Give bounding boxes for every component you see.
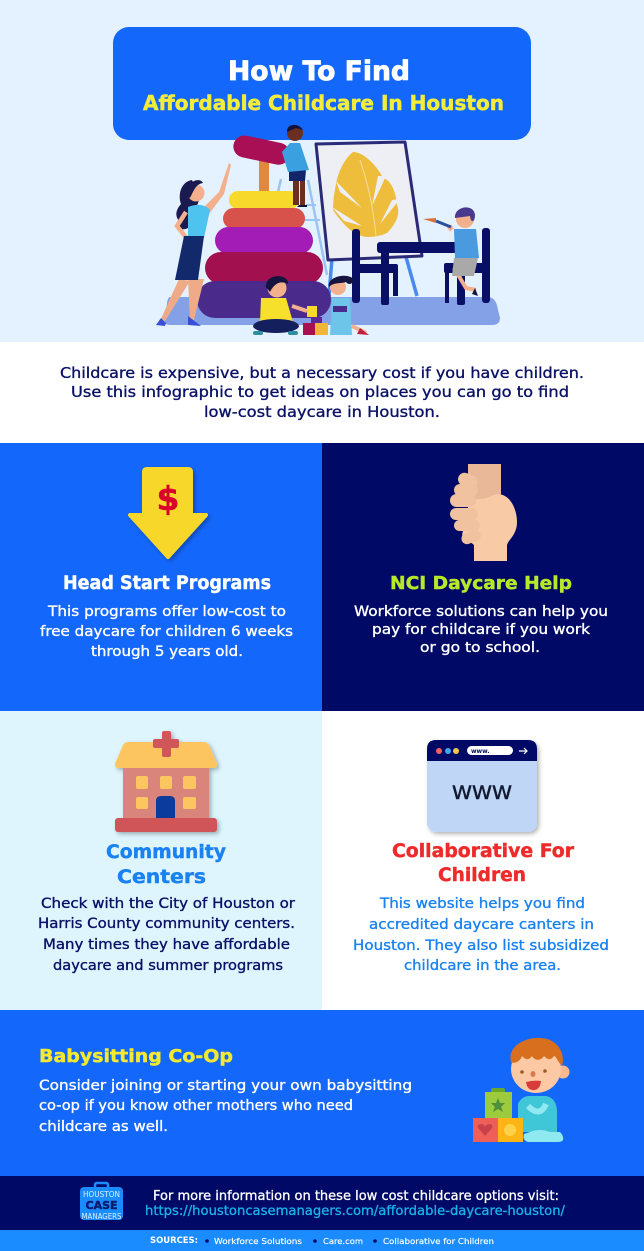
heading: Centers <box>117 866 206 888</box>
panel: Head Start Programs: Head Start Programs <box>63 572 271 594</box>
intro text panel <box>0 342 644 443</box>
table and chairs <box>352 228 490 305</box>
panel: Collaborative For Children <box>322 711 644 1010</box>
panel: NCI Daycare Help <box>322 443 644 711</box>
icon: toddler with blocks <box>473 1038 570 1142</box>
icon: browser window: WWW <box>452 782 512 804</box>
panel: Head Start Programs <box>0 443 322 711</box>
panel: Head Start Programs: free daycare for children 6 weeks <box>40 624 293 640</box>
logo: Houston Case Managers: MANAGERS <box>82 1212 122 1221</box>
sources bar: Care.com <box>323 1237 363 1246</box>
logo: Houston Case Managers: HOUSTON <box>83 1190 120 1199</box>
heading: Community <box>106 841 227 863</box>
panel: Babysitting Co-Op <box>0 1010 644 1176</box>
icon: down arrow with dollar sign: $ <box>157 479 179 518</box>
icon: community building <box>115 731 217 832</box>
heading <box>392 840 575 886</box>
intro text panel: Childcare is expensive, but a necessary cost if you have children. <box>60 364 584 382</box>
intro text panel: low-cost daycare in Houston. <box>204 403 440 421</box>
sources bar: Workforce Solutions <box>214 1237 302 1246</box>
painting child <box>423 207 479 296</box>
panel: NCI Daycare Help: NCI Daycare Help <box>390 573 572 594</box>
panel: Collaborative For Children: Houston. They also list subsidized <box>353 938 609 954</box>
panel: Babysitting Co-Op: childcare as well. <box>39 1119 168 1135</box>
title banner <box>113 27 531 140</box>
intro text panel: Use this infographic to get ideas on places you can go to find <box>71 383 569 401</box>
illustration: children playing with giant toys <box>156 125 500 335</box>
footer panel <box>0 1176 644 1230</box>
panel: Babysitting Co-Op: Consider joining or starting your own babysitting <box>39 1078 412 1094</box>
child on ladder <box>282 125 309 207</box>
heading: Collaborative For <box>392 840 575 862</box>
panel: Community Centers: daycare and summer programs <box>53 958 283 974</box>
girl with block <box>329 276 369 335</box>
panel: Head Start Programs: This programs offer low-cost to <box>47 604 286 620</box>
panel: Collaborative For Children: This website helps you find <box>379 896 585 912</box>
heading <box>106 841 227 888</box>
panel: Collaborative For Children: childcare in the area. <box>404 958 561 974</box>
icon: down arrow with dollar sign <box>130 469 206 557</box>
panel: NCI Daycare Help: pay for childcare if you work <box>372 622 591 638</box>
panel: Babysitting Co-Op: co-op if you know other mothers who need <box>39 1098 353 1114</box>
panel: Community Centers <box>0 711 322 1010</box>
panel: Community Centers: Harris County community centers. <box>38 916 295 932</box>
logo: Houston Case Managers: CASE <box>86 1199 118 1212</box>
panel: Head Start Programs: through 5 years old. <box>91 644 243 660</box>
sitting boy with blocks <box>253 276 328 335</box>
title banner: How To Find <box>228 56 410 87</box>
panel: NCI Daycare Help: Workforce solutions can help you <box>354 604 608 620</box>
sources bar: Collaborative for Children <box>383 1237 494 1246</box>
logo: Houston Case Managers <box>80 1183 123 1221</box>
panel: Babysitting Co-Op: Babysitting Co-Op <box>39 1046 233 1067</box>
panel: Community Centers: Many times they have affordable <box>43 937 290 953</box>
sources bar: SOURCES: <box>150 1236 198 1246</box>
panel: header <box>0 0 644 342</box>
panel: Collaborative For Children: accredited daycare canters in <box>369 917 594 933</box>
icon: browser window: www. <box>471 748 490 755</box>
icon: browser window <box>427 740 537 832</box>
icon: supporting hand <box>450 464 517 561</box>
panel: Community Centers: Check with the City of Houston or <box>41 896 295 912</box>
sources bar <box>0 1230 644 1251</box>
footer panel: For more information on these low cost childcare options visit: <box>153 1189 559 1204</box>
panel: NCI Daycare Help: or go to school. <box>420 640 540 656</box>
woman pointing <box>156 163 231 326</box>
heading: Children <box>438 864 526 886</box>
title banner: Affordable Childcare In Houston <box>143 91 504 115</box>
footer panel: https://houstoncasemanagers.com/affordable-daycare-houston/ <box>145 1204 566 1219</box>
leaf painting <box>332 152 400 237</box>
